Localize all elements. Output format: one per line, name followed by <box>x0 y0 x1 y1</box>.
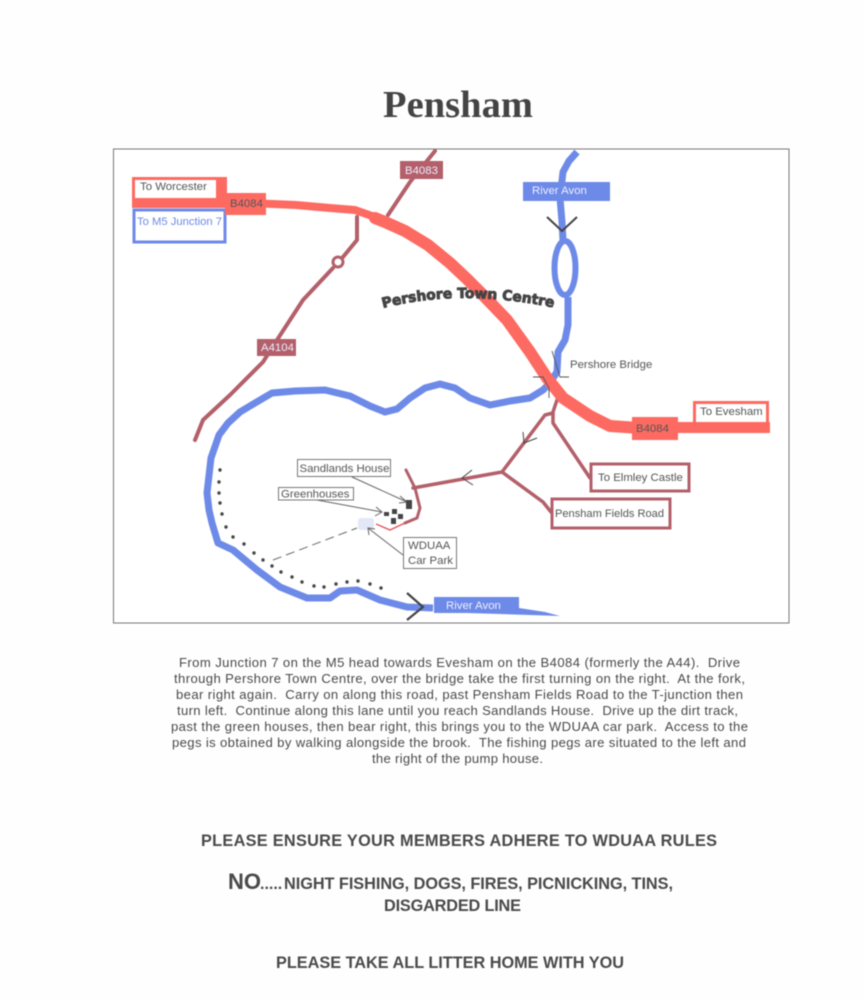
directions paragraph: pegs is obtained by walking alongside the brook. The fishing pegs are situated to the left and <box>172 735 746 750</box>
road B4083 <box>388 151 435 215</box>
arrow: river flow lower <box>407 593 423 620</box>
sandlands house marker <box>406 500 412 509</box>
road to Elmley Castle <box>553 400 590 478</box>
fishing peg dots <box>217 468 383 590</box>
directions paragraph: turn left. Continue along this lane until you reach Sandlands House. Drive up the dirt track, <box>177 703 738 718</box>
label: River Avon lower <box>434 597 519 613</box>
arrow: direction lane <box>462 470 473 485</box>
arrow: direction fork <box>523 432 537 443</box>
label: Pensham Fields Road <box>552 499 670 528</box>
label: B4083: B4083 <box>405 165 438 177</box>
label: Pershore Bridge: Pershore Bridge <box>570 359 652 371</box>
road B4084 east band <box>640 422 770 433</box>
directions paragraph: bear right again. Carry on along this road, past Pensham Fields Road to the T-junction then <box>176 687 743 702</box>
label: To Evesham: To Evesham <box>700 406 763 418</box>
lane to Sandlands House <box>405 470 420 523</box>
label: To M5 Junction 7: To M5 Junction 7 <box>137 216 222 228</box>
label: Sandlands House <box>298 460 390 476</box>
label: To Worcester: To Worcester <box>140 181 207 193</box>
prohibited items: NO <box>228 869 261 894</box>
label: To Elmley Castle: To Elmley Castle <box>598 472 683 484</box>
label: B4084 east: B4084 <box>636 423 669 435</box>
prohibited items: DISGARDED LINE <box>384 897 521 915</box>
title: Pensham <box>383 84 533 126</box>
prohibited items: ..... <box>260 876 282 893</box>
label: To M5 Junction 7 <box>134 210 225 242</box>
town label: Pershore Town Centre <box>380 286 555 309</box>
river tail taper <box>434 603 560 616</box>
directions paragraph <box>171 655 748 766</box>
label: A4104: A4104 <box>261 342 294 354</box>
label: B4083 <box>400 161 443 179</box>
roundabout <box>333 257 343 267</box>
directions paragraph: the right of the pump house. <box>372 751 543 766</box>
greenhouse markers <box>384 509 403 524</box>
car park patch <box>358 518 374 530</box>
label: WDUAA Car Park: WDUAA <box>408 540 451 552</box>
leader: Greenhouses <box>317 500 382 516</box>
road A4104 <box>195 217 357 440</box>
label: Pensham Fields Road: Pensham Fields Road <box>555 508 664 520</box>
label: B4084 west: B4084 <box>230 198 263 210</box>
label: To Worcester <box>132 177 227 208</box>
river Avon: upper channel <box>207 152 577 608</box>
directions paragraph: From Junction 7 on the M5 head towards Evesham on the B4084 (formerly the A44). Drive <box>179 655 740 670</box>
label: River Avon upper: River Avon <box>532 185 587 197</box>
directions paragraph: past the green houses, then bear right, this brings you to the WDUAA car park. Access to the <box>171 719 748 734</box>
dashed path to pegs <box>273 528 357 560</box>
rules heading: PLEASE ENSURE YOUR MEMBERS ADHERE TO WDUAA RULES <box>201 832 717 850</box>
panel: location map <box>112 148 790 624</box>
label: B4084 west <box>225 193 266 215</box>
bridge markers <box>533 351 569 398</box>
leader: Sandlands House <box>352 477 407 503</box>
dirt track <box>376 523 405 530</box>
label: A4104 <box>257 339 296 356</box>
prohibited items <box>228 869 673 915</box>
label: B4084 east <box>632 417 678 440</box>
label: WDUAA Car Park: Car Park <box>408 555 453 567</box>
prohibited items: NIGHT FISHING, DOGS, FIRES, PICNICKING, TINS, <box>284 875 673 893</box>
road to T-junction and Pensham Fields Road <box>413 413 553 512</box>
road B4084 town section <box>375 218 640 428</box>
river island loop <box>554 241 576 295</box>
litter notice: PLEASE TAKE ALL LITTER HOME WITH YOU <box>276 954 624 972</box>
label: To Evesham <box>694 402 768 424</box>
label: River Avon upper <box>523 182 610 201</box>
directions paragraph: through Pershore Town Centre, over the bridge take the first turning on the right. At the fork, <box>174 671 745 686</box>
label: To Elmley Castle <box>591 464 689 491</box>
leader: WDUAA Car Park <box>368 528 403 555</box>
label: WDUAA Car Park <box>404 538 456 568</box>
label: Sandlands House: Sandlands House <box>300 463 389 475</box>
label: River Avon lower: River Avon <box>446 600 501 612</box>
arrow: river flow upper <box>547 217 577 231</box>
label: Greenhouses: Greenhouses <box>281 488 350 500</box>
road B4084 <box>250 203 372 216</box>
